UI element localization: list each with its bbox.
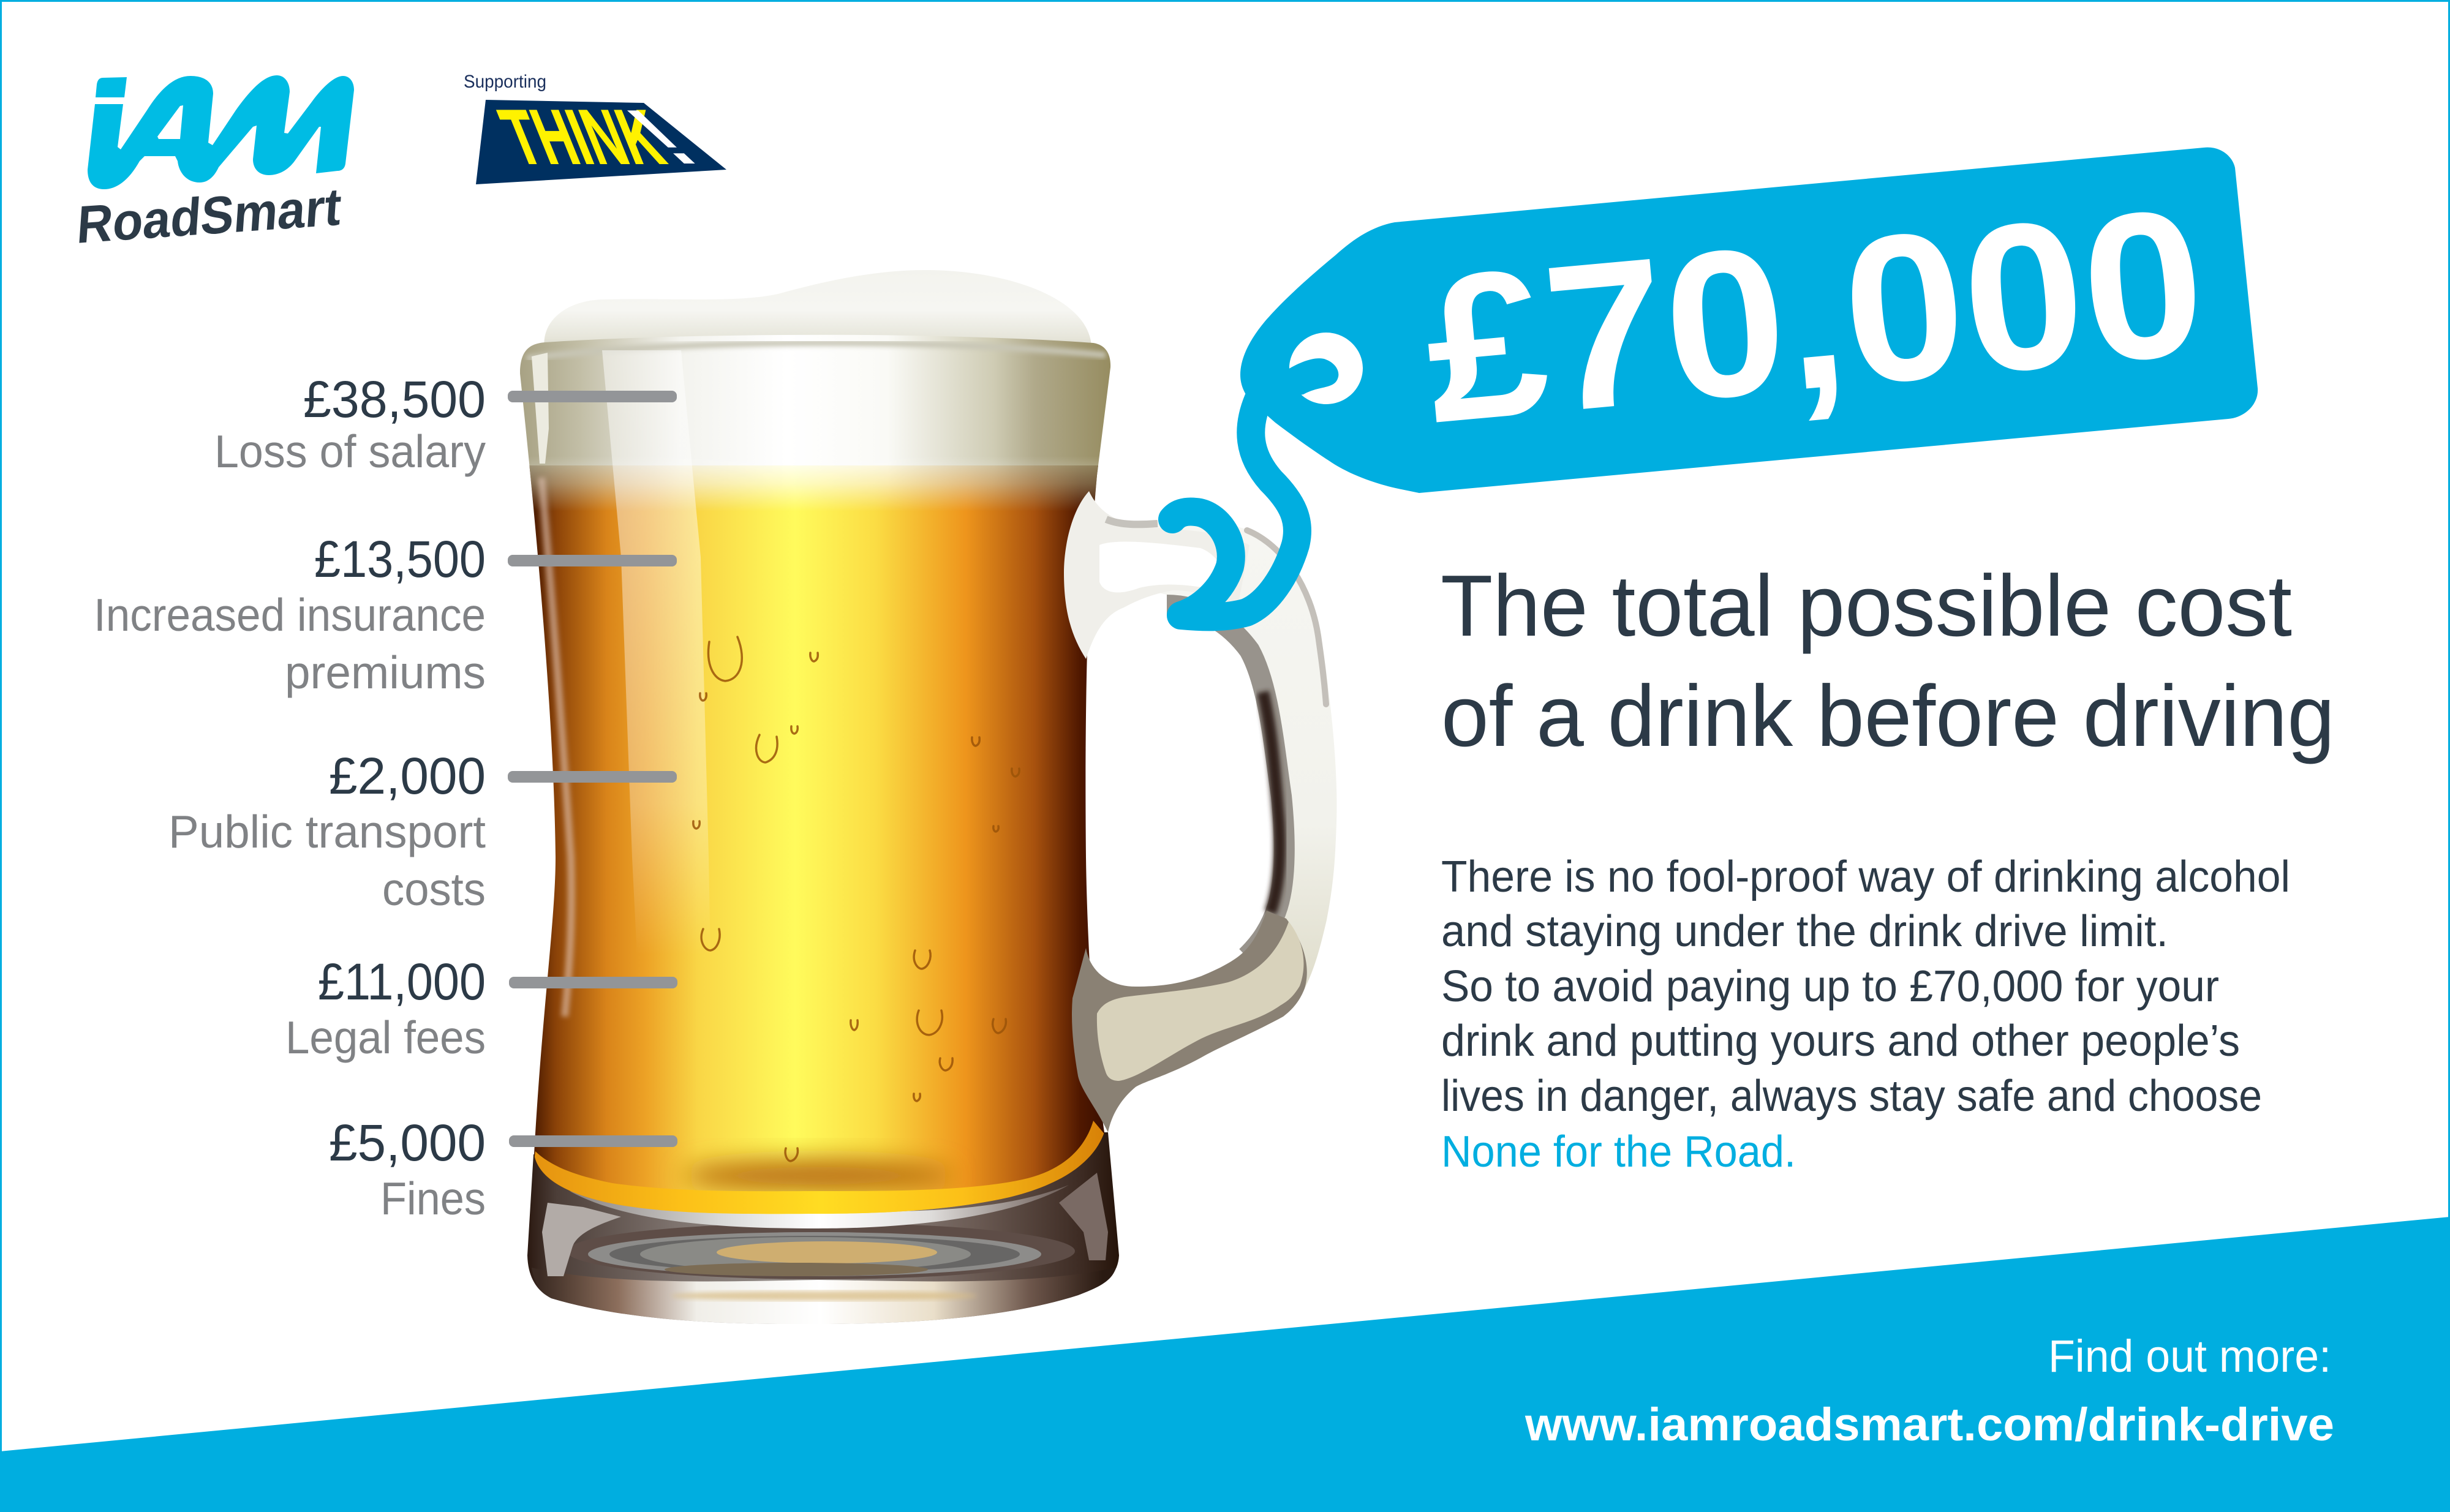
handle lower joint panel: [1097, 922, 1303, 1081]
legal fees: Legal fees: [285, 1012, 486, 1063]
tag string: [1172, 392, 1297, 617]
body paragraph: and staying under the drink drive limit.: [1441, 907, 2168, 956]
price tag: [1172, 148, 2258, 617]
base right highlight: [1059, 1173, 1108, 1260]
handle collar white panel: [1099, 542, 1225, 592]
fines: [329, 1114, 486, 1224]
fines: Fines: [380, 1173, 486, 1224]
glass highlight stripe: [602, 350, 710, 955]
increased insurance premiums: [94, 530, 486, 698]
foam dome: [544, 270, 1091, 350]
cost tick marks: [508, 391, 677, 1147]
handle upper collar: [1064, 491, 1250, 659]
supporting label: Supporting: [464, 72, 546, 92]
footer text: find out more: Find out more:: [2048, 1331, 2331, 1382]
handle body: [1139, 521, 1336, 1017]
base concentric rings: [567, 1223, 1075, 1279]
increased insurance premiums: Increased insurance: [94, 589, 486, 641]
handle lower joint outer: [1072, 911, 1307, 1132]
beer gold band: [527, 1121, 1109, 1219]
logo: supporting THINK!: [464, 72, 726, 184]
body paragraph: [1441, 852, 2290, 1176]
footer band: [0, 1217, 2450, 1512]
heading: The total possible cost: [1441, 557, 2292, 655]
mug handle: [1064, 491, 1336, 1132]
fines: £5,000: [329, 1114, 486, 1172]
tag amount: £70,000: [1416, 165, 2213, 467]
beer mug: [514, 270, 1336, 1324]
loss of salary: £38,500: [303, 370, 486, 428]
beer gradient: [514, 465, 1115, 1225]
rim top shading: [527, 343, 1106, 358]
handle collar grey top line: [1106, 519, 1158, 524]
cost breakdown labels: [94, 370, 486, 1224]
THINK exclamation: !: [602, 94, 720, 180]
heading: [1441, 557, 2335, 765]
public transport costs: £2,000: [329, 747, 486, 805]
mug base: [527, 1132, 1119, 1324]
tag string end in hole: [1283, 358, 1338, 398]
logo: IAM RoadSmart: [75, 75, 354, 255]
beer bottom shade: [684, 1159, 953, 1193]
base gold reflection: [671, 1291, 977, 1301]
loss of salary: Loss of salary: [214, 426, 486, 477]
logo wordmark: RoadSmart: RoadSmart: [75, 178, 343, 255]
THINK word: THINK: [489, 94, 675, 180]
increased insurance premiums: £13,500: [314, 530, 486, 588]
body paragraph: There is no fool-proof way of drinking alcohol: [1441, 852, 2290, 901]
legal fees: £11,000: [318, 953, 486, 1010]
loss of salary: [214, 370, 486, 477]
handle outer grey edge: [1247, 530, 1326, 704]
base lower glass band: [532, 1268, 1116, 1324]
bubbles: [693, 637, 1019, 1161]
base left highlight: [542, 1203, 621, 1276]
public transport costs: costs: [382, 863, 486, 915]
tag body: [1240, 148, 2258, 493]
left glass rim shine: [532, 353, 549, 464]
THINK badge: [476, 100, 726, 184]
heading: of a drink before driving: [1441, 668, 2335, 765]
logo mark: iAM: [88, 75, 354, 189]
legal fees: [285, 953, 486, 1063]
handle inner grey band: [1167, 605, 1284, 957]
left glass edge shine: [541, 478, 571, 1017]
body paragraph: None for the Road.: [1441, 1127, 1796, 1176]
base top white arc: [570, 1185, 1069, 1228]
footer text: website: www.iamroadsmart.com/drink-drive: [1525, 1399, 2334, 1451]
public transport costs: Public transport: [168, 806, 486, 857]
body paragraph: lives in danger, always stay safe and choose: [1441, 1072, 2262, 1121]
body paragraph: drink and putting yours and other people’s: [1441, 1017, 2240, 1066]
body paragraph: So to avoid paying up to £70,000 for your: [1441, 962, 2219, 1011]
foam head in glass: [514, 331, 1115, 521]
public transport costs: [168, 747, 486, 915]
handle inner dark edge: [1263, 692, 1280, 912]
increased insurance premiums: premiums: [285, 647, 486, 698]
glass body with beer: [514, 331, 1115, 1225]
